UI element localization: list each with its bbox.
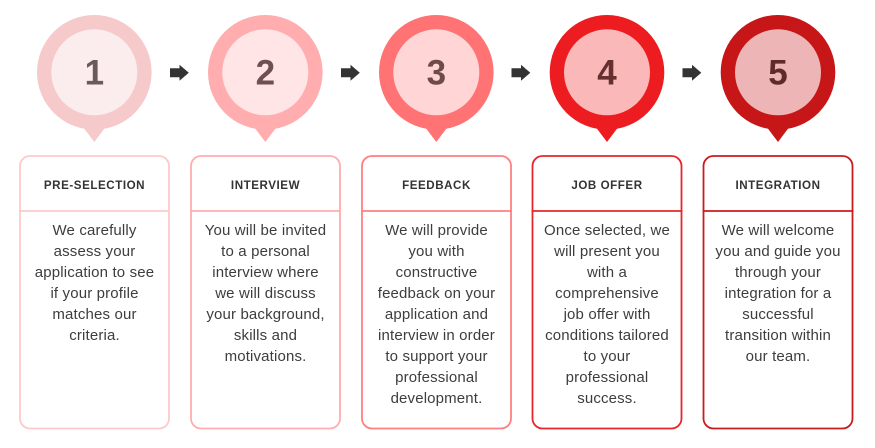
card 1: if your profile: [50, 285, 139, 302]
card 1: assess your: [54, 243, 135, 260]
icon: pin 4: 4: [597, 54, 617, 93]
step 4: job offer: [532, 15, 682, 429]
card 1: [19, 156, 170, 428]
card 4: comprehensive: [555, 285, 659, 302]
icon: pin 5: 5: [768, 54, 788, 93]
card 2: your background,: [206, 306, 325, 323]
step 1: pre-selection: [19, 15, 170, 429]
card 5: our team.: [746, 348, 810, 365]
card 4: success.: [577, 390, 637, 407]
card 3: FEEDBACK: [402, 179, 471, 192]
icon: pin 1: 1: [85, 54, 104, 93]
icon: pin 3: [379, 15, 494, 142]
step 2: interview: [190, 15, 341, 429]
arrow 1: [170, 65, 189, 81]
icon: pin 2: [208, 15, 323, 142]
card 3: application and: [385, 306, 488, 323]
card 2: interview where: [212, 264, 319, 281]
card 2: we will discuss: [214, 285, 316, 302]
card 1: criteria.: [69, 327, 120, 344]
card 5: you and guide you: [715, 243, 841, 260]
card 5: transition within: [725, 327, 831, 344]
icon: pin 1: [37, 15, 152, 142]
card 4: [532, 156, 682, 428]
card 3: professional: [395, 369, 478, 386]
card 2: skills and: [234, 327, 297, 344]
card 4: professional: [566, 369, 648, 386]
card 4: job offer with: [563, 306, 650, 323]
card 5: We will welcome: [722, 222, 834, 239]
card 2: [190, 156, 341, 428]
card 3: We will provide: [385, 222, 488, 239]
icon: pin 3: 3: [427, 54, 446, 93]
card 3: feedback on your: [378, 285, 495, 302]
card 4: to your: [584, 348, 630, 365]
card 3: interview in order: [378, 327, 495, 344]
card 3: development.: [391, 390, 482, 407]
card 2: motivations.: [225, 348, 306, 365]
arrow 4: [682, 65, 701, 81]
card 5: through your: [735, 264, 821, 281]
card 4: JOB OFFER: [571, 179, 643, 192]
card 4: Once selected, we: [544, 222, 670, 239]
card 4: will present you: [553, 243, 660, 260]
card 4: conditions tailored: [545, 327, 669, 344]
card 1: PRE-SELECTION: [44, 179, 145, 192]
card 3: constructive: [396, 264, 477, 281]
card 3: you with: [408, 243, 465, 260]
card 5: INTEGRATION: [735, 179, 821, 192]
card 3: [361, 156, 512, 428]
card 2: INTERVIEW: [231, 179, 300, 192]
card 4: with a: [586, 264, 628, 281]
card 2: You will be invited: [205, 222, 326, 239]
step 5: integration: [702, 15, 854, 429]
card 1: application to see: [35, 264, 154, 281]
icon: pin 5: [721, 15, 835, 142]
card 1: We carefully: [52, 222, 137, 239]
card 1: matches our: [52, 306, 137, 323]
card 3: to support your: [385, 348, 488, 365]
arrow 2: [341, 65, 360, 81]
icon: pin 2: 2: [256, 54, 275, 93]
card 5: successful: [742, 306, 814, 323]
icon: pin 4: [550, 15, 664, 142]
step 3: feedback: [361, 15, 512, 429]
card 5: [702, 156, 854, 428]
card 5: integration for a: [725, 285, 832, 302]
card 2: to a personal: [221, 243, 310, 260]
arrow 3: [512, 65, 530, 81]
